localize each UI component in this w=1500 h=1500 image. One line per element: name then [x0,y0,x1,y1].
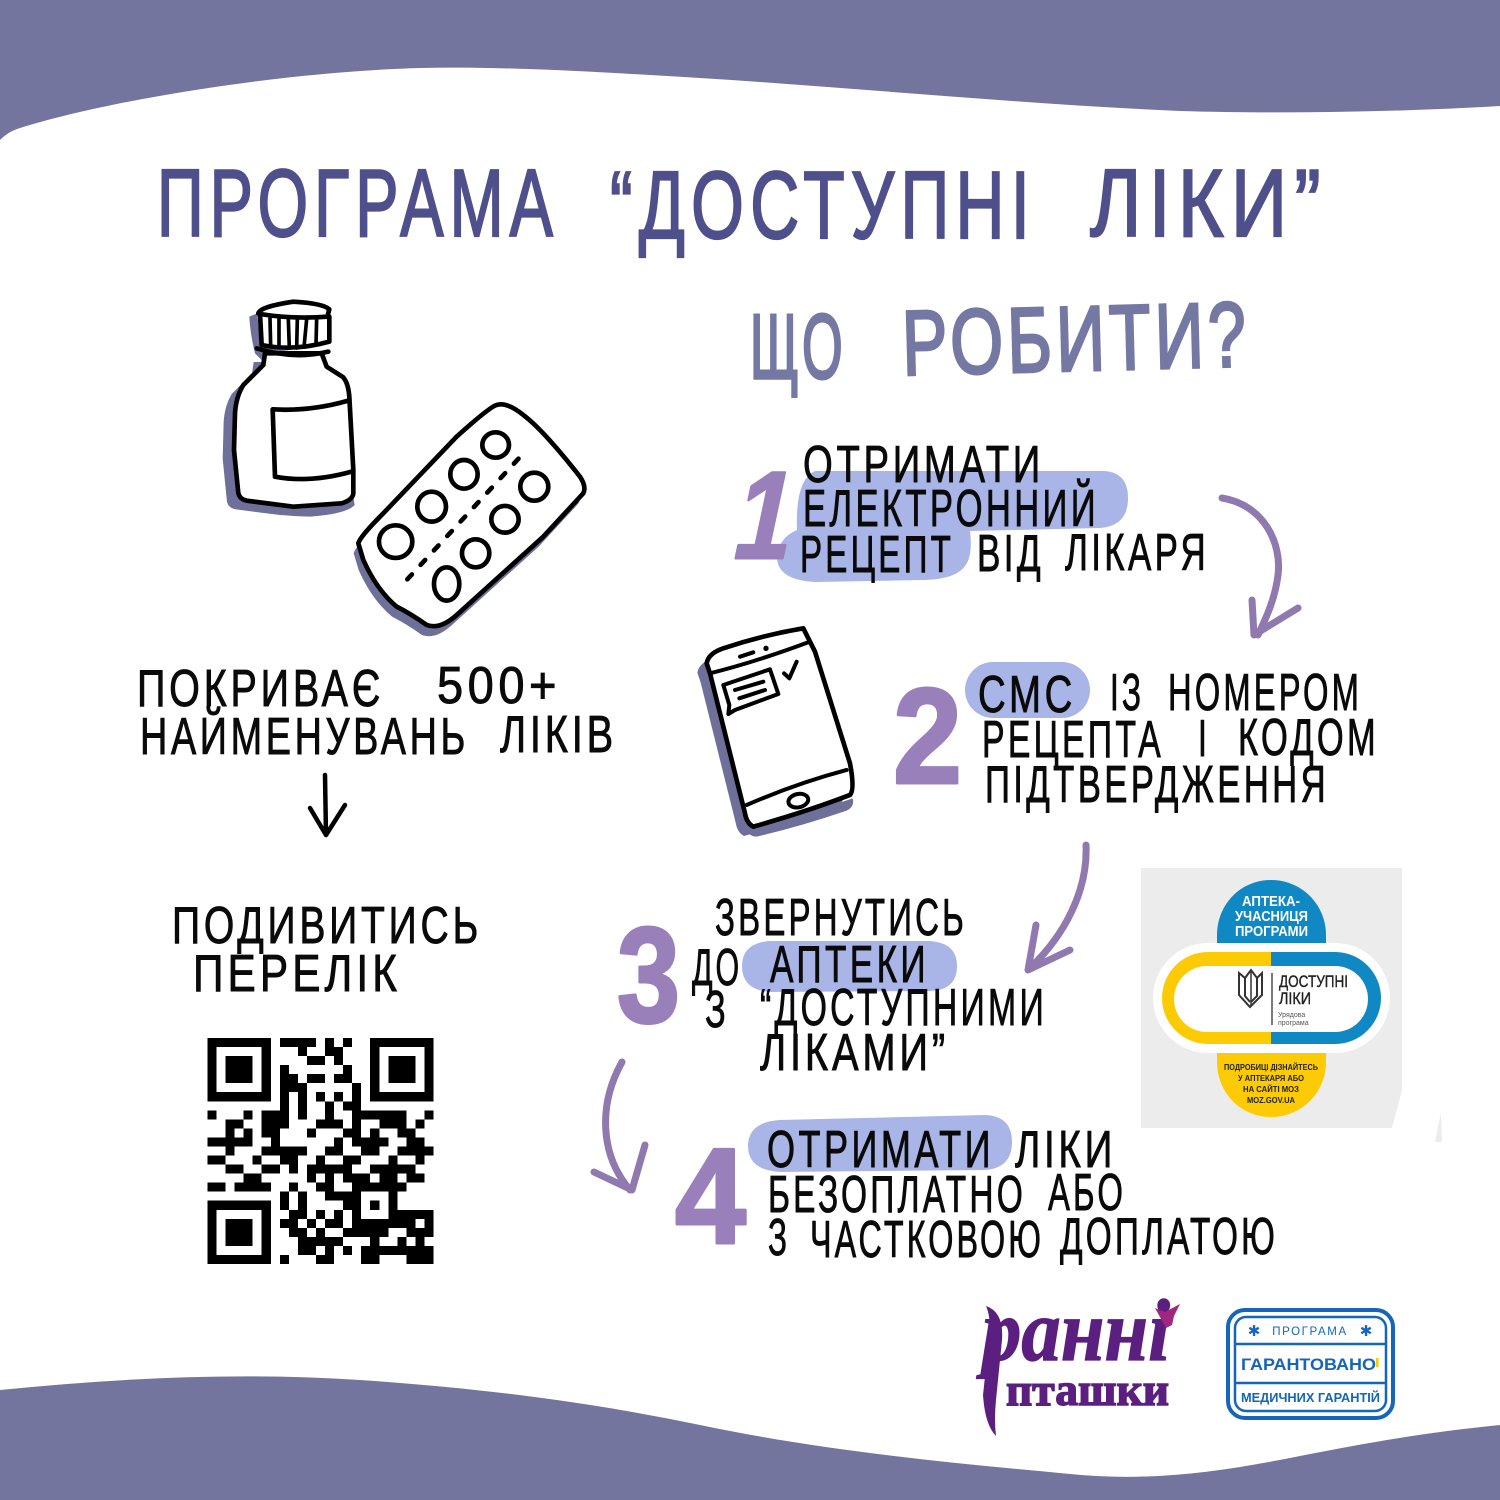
coverage text: 500+ [437,657,561,715]
small grey scrap [1435,1112,1442,1142]
step 1 number: 1 [724,445,809,585]
logo: Програма Гарантовано stamp: ✱ [1360,1323,1372,1340]
step 2 text: ІЗ [1110,664,1144,722]
step 4 text: ОТРИМАТИ [767,1121,994,1179]
step 2 text: НОМЕРОМ [1168,664,1362,722]
coverage text: НАЙМЕНУВАНЬ [140,707,469,766]
step 1 text: ОТРИМАТИ [803,436,1044,494]
icon: medicine bottle [223,302,355,517]
QR code [208,1038,434,1264]
sticker top blue cap: УЧАСНИЦЯ [1235,909,1308,925]
step 1 text [800,436,1209,584]
pharmacy sticker [1141,868,1402,1128]
step 2 [893,660,1379,814]
bottom wave band [0,1376,1500,1500]
arrow: step 2 to 3 [1028,845,1086,970]
step 4 text: ЧАСТКОВОЮ [810,1211,1044,1269]
logo: Ранні пташки [976,1283,1180,1436]
sticker pill logo: Урядова [1278,1012,1305,1019]
step 4 number: 4 [675,1120,746,1272]
text: view list: ПЕРЕЛІК [193,945,401,1003]
heading: what to do [750,284,1251,398]
icon: phone [697,628,853,837]
logo: Програма Гарантовано stamp: ✱ [1248,1323,1260,1340]
step 3 text: ДО [692,939,742,997]
step 3 text [692,889,1047,1082]
coverage text [137,657,617,766]
step 4 text: З [768,1209,790,1267]
step 3 text: ЛІКАМИ” [760,1024,949,1082]
step 4 text: БЕЗОПЛАТНО [768,1166,1026,1224]
step 2 text: РЕЦЕПТА [982,711,1164,769]
sticker bottom yellow cap [1217,1050,1326,1117]
step 3 text: “ДОСТУПНИМИ [760,979,1047,1037]
title: “ДОСТУПНІ [610,152,1036,259]
sticker pill logo: ЛІКИ [1279,989,1311,1008]
sticker bottom yellow cap: ПОДРОБИЦІ ДІЗНАЙТЕСЬ [1224,1061,1318,1072]
step 3 text: З [705,981,729,1039]
step 4 text: ДОПЛАТОЮ [1060,1208,1278,1266]
sticker pill logo [1153,943,1390,1053]
sticker pill logo: ДОСТУПНІ [1279,972,1348,991]
step 4 text: ЛІКИ [1015,1121,1116,1179]
arrow: down to list [310,775,345,835]
title: ПРОГРАМА [157,150,559,257]
heading: what to do: ЩО [750,296,846,398]
step 4 text: АБО [1048,1164,1126,1222]
text: view list: ПОДИВИТИСЬ [172,897,482,955]
step 1 highlight pills [777,471,1128,582]
step 2 text [978,664,1379,814]
step 4 text [767,1121,1278,1269]
logo: Програма Гарантовано stamp [1228,1310,1393,1418]
step 1 text: ВІД [977,525,1044,583]
sticker top blue cap: АПТЕКА- [1242,894,1300,910]
step 1 text: ЕЛЕКТРОННИЙ [803,479,1099,538]
step 4 [675,1115,1278,1272]
arrow: step 3 to 4 [594,1062,645,1190]
sticker bottom yellow cap: У АПТЕКАРЯ АБО [1238,1073,1304,1083]
title: ЛІКИ” [1090,150,1328,257]
text: view list [172,897,482,1003]
step 3 text: ЗВЕРНУТИСЬ [715,889,967,947]
step 2 text: КОДОМ [1238,709,1379,767]
sticker pill logo: програма [1278,1020,1309,1027]
step 3 number: 3 [617,899,680,1051]
step 3 [617,889,1047,1082]
step 2 highlight pill [965,662,1090,718]
top wave band [0,0,1500,140]
icon: blister pack [354,404,584,636]
sticker top blue cap [1217,880,1326,945]
step 2 text: І [1198,710,1210,768]
logo: Програма Гарантовано stamp: ПРОГРАМА [1272,1326,1348,1338]
sticker bottom yellow cap: НА САЙТІ МОЗ [1243,1083,1299,1094]
sticker top blue cap: ПРОГРАМИ [1235,924,1308,940]
step 1 [724,436,1209,585]
logo: Програма Гарантовано stamp: МЕДИЧНИХ ГАРАНТІЙ [1241,1390,1380,1405]
step 1 text: ЛІКАРЯ [1065,524,1209,582]
logo: Ранні пташки: ранні [976,1283,1170,1380]
step 2 text: СМС [978,666,1076,724]
logo: Ранні пташки: пташки [1006,1364,1169,1415]
sticker bottom yellow cap: MOZ.GOV.UA [1247,1095,1295,1105]
step 2 number: 2 [893,660,962,812]
title [157,150,1328,259]
coverage text: ПОКРИВАЄ [137,660,384,718]
step 2 text: ПІДТВЕРДЖЕННЯ [985,756,1329,814]
heading: what to do: РОБИТИ? [901,284,1251,395]
step 3 highlight pill [742,941,957,992]
step 4 highlight pill [748,1115,1012,1172]
step 1 text: РЕЦЕПТ [800,526,954,584]
logo: Програма Гарантовано stamp: ГАРАНТОВАНО [1241,1356,1376,1374]
arrow: step 1 to 2 [1222,498,1298,635]
step 3 text: АПТЕКИ [770,936,929,994]
coverage text: ЛІКІВ [500,706,617,764]
